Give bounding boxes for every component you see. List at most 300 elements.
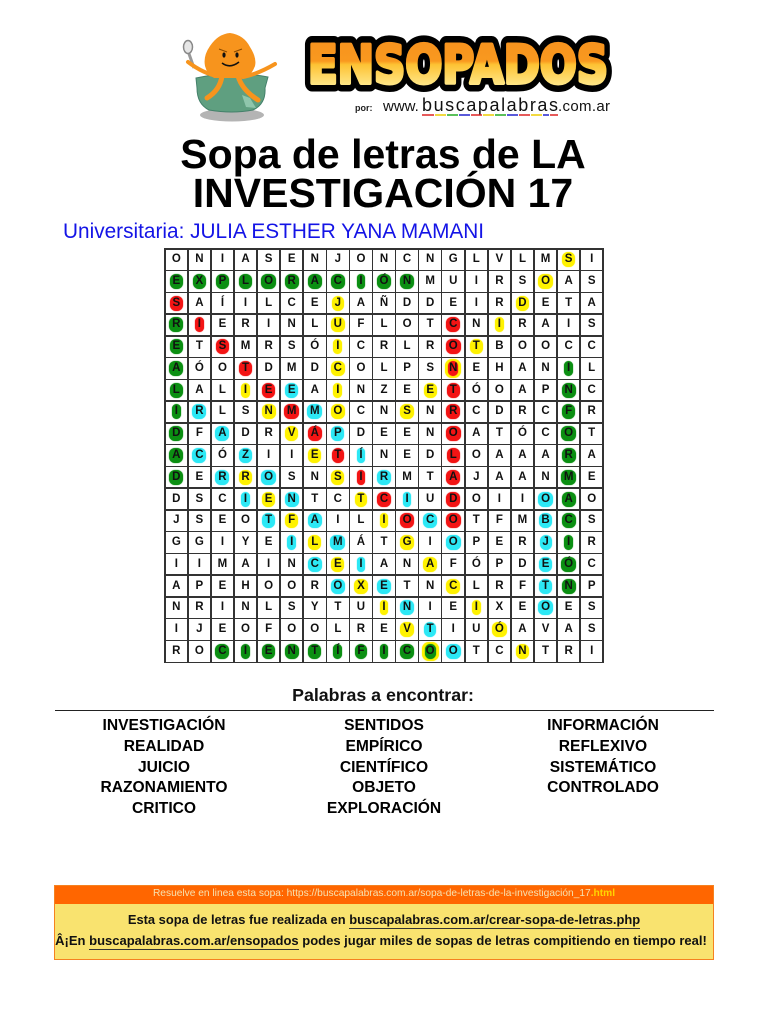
word search grid: C bbox=[357, 405, 365, 417]
word list: column 3 bbox=[547, 716, 659, 796]
word search grid: S bbox=[565, 253, 572, 265]
footer line 2: Â¡En buscapalabras.com.ar/ensopados podes jugar miles de sopas de letras compitiendo en tiempo real! bbox=[55, 933, 707, 948]
word search grid: O bbox=[264, 275, 273, 287]
word search grid: R bbox=[172, 318, 180, 330]
word search grid: A bbox=[564, 623, 573, 635]
word search grid: R bbox=[218, 471, 227, 483]
word search grid: F bbox=[357, 645, 364, 657]
word search grid: R bbox=[518, 536, 527, 548]
word search grid: I bbox=[244, 645, 247, 657]
word search grid: L bbox=[404, 340, 411, 352]
word search grid: T bbox=[427, 471, 434, 483]
word search grid: V bbox=[542, 623, 549, 635]
word search grid: A bbox=[195, 297, 204, 309]
word search grid: E bbox=[542, 558, 549, 570]
word list: column 1: CRITICO bbox=[132, 800, 196, 817]
website credit: buscapalabras bbox=[422, 95, 558, 115]
word list: column 3: REFLEXIVO bbox=[559, 738, 647, 755]
word search grid: A bbox=[518, 362, 527, 374]
word search grid: T bbox=[473, 645, 480, 657]
footer link bar: Resuelve en linea esta sopa: https://buscapalabras.com.ar/sopa-de-letras-de-la-investigación_17.html bbox=[153, 888, 615, 899]
word search grid: E bbox=[403, 449, 411, 461]
word search grid: P bbox=[196, 580, 203, 592]
word search grid: Í bbox=[359, 449, 363, 461]
word search grid: I bbox=[590, 645, 593, 657]
word search grid: U bbox=[426, 493, 434, 505]
word search grid: I bbox=[336, 384, 339, 396]
word search grid: S bbox=[519, 275, 526, 287]
word search grid: A bbox=[311, 275, 319, 287]
word search grid: A bbox=[495, 449, 504, 461]
word search grid: I bbox=[429, 536, 432, 548]
word search grid: Y bbox=[311, 601, 319, 613]
word search grid: Ó bbox=[195, 362, 204, 374]
website credit: por: bbox=[355, 103, 372, 113]
word search grid: I bbox=[382, 514, 386, 526]
word search grid: R bbox=[495, 297, 504, 309]
word search grid: E bbox=[311, 449, 319, 461]
word search grid: A bbox=[541, 449, 550, 461]
word search grid: D bbox=[518, 297, 527, 309]
word search grid: F bbox=[265, 623, 272, 635]
word search grid: P bbox=[496, 558, 503, 570]
word search grid: L bbox=[311, 536, 318, 548]
word search grid: S bbox=[334, 471, 342, 483]
word search grid: L bbox=[334, 623, 341, 635]
word list: column 2 bbox=[327, 717, 441, 817]
word search grid: L bbox=[473, 580, 480, 592]
word search grid: J bbox=[542, 536, 549, 548]
word search grid: I bbox=[175, 623, 178, 635]
word search grid: A bbox=[588, 297, 596, 309]
word search grid: A bbox=[172, 580, 180, 592]
website credit: www. bbox=[382, 98, 419, 115]
word search grid: F bbox=[519, 580, 526, 592]
word search grid: E bbox=[380, 580, 388, 592]
word search grid: C bbox=[380, 493, 388, 505]
word search grid: C bbox=[588, 558, 596, 570]
word search grid: S bbox=[288, 471, 296, 483]
word search grid: O bbox=[287, 580, 296, 592]
word search grid: I bbox=[590, 253, 593, 265]
word search grid: Y bbox=[242, 536, 249, 548]
word search grid: Ó bbox=[380, 275, 388, 287]
word search grid: O bbox=[356, 362, 365, 374]
word search grid: E bbox=[542, 297, 549, 309]
word search grid: R bbox=[518, 318, 527, 330]
word search grid: T bbox=[588, 427, 595, 439]
word search grid: B bbox=[495, 340, 504, 352]
word search grid: R bbox=[264, 340, 273, 352]
word list: column 2: SENTIDOS bbox=[344, 717, 424, 734]
word search grid: U bbox=[357, 601, 365, 613]
word search grid: O bbox=[449, 427, 458, 439]
word search grid: V bbox=[496, 253, 503, 265]
word search grid bbox=[164, 248, 604, 663]
word search grid: N bbox=[541, 471, 550, 483]
word search grid: D bbox=[403, 297, 411, 309]
word list: column 3: INFORMACIÓN bbox=[547, 717, 659, 734]
word search grid: R bbox=[380, 340, 388, 352]
word search grid: C bbox=[449, 580, 457, 592]
word search grid: D bbox=[172, 427, 180, 439]
word search grid: S bbox=[588, 623, 596, 635]
word search grid: S bbox=[588, 514, 596, 526]
word search grid: C bbox=[588, 340, 596, 352]
word search grid: I bbox=[221, 536, 224, 548]
word search grid: Ñ bbox=[380, 297, 388, 309]
word search grid: A bbox=[172, 449, 180, 461]
word search grid: A bbox=[518, 384, 527, 396]
word search grid: G bbox=[449, 253, 458, 265]
word search grid: A bbox=[472, 427, 480, 439]
word search grid: C bbox=[334, 275, 342, 287]
word search grid: R bbox=[588, 405, 596, 417]
word search grid: O bbox=[449, 645, 458, 657]
word search grid: H bbox=[495, 362, 504, 374]
word search grid: D bbox=[495, 405, 504, 417]
word search grid: T bbox=[404, 580, 411, 592]
word search grid: O bbox=[310, 623, 319, 635]
word search grid: F bbox=[288, 514, 295, 526]
word search grid: N bbox=[426, 253, 434, 265]
word search grid: Á bbox=[357, 536, 365, 548]
word search grid: P bbox=[472, 536, 480, 548]
word search grid: R bbox=[495, 580, 504, 592]
word list: column 3: SISTEMÁTICO bbox=[550, 759, 656, 776]
word search grid: T bbox=[473, 340, 480, 352]
word search grid: A bbox=[380, 558, 388, 570]
word search grid: J bbox=[335, 297, 341, 309]
word search grid: S bbox=[588, 318, 596, 330]
word search grid: J bbox=[335, 253, 341, 265]
word search grid: S bbox=[219, 340, 226, 352]
word search grid: N bbox=[426, 405, 434, 417]
word search grid: O bbox=[518, 340, 527, 352]
word search grid: O bbox=[449, 340, 458, 352]
word search grid: L bbox=[173, 384, 180, 396]
word search grid: A bbox=[218, 427, 227, 439]
word search grid: B bbox=[541, 514, 550, 526]
word search grid: A bbox=[495, 471, 504, 483]
word search grid: O bbox=[587, 493, 596, 505]
footer link bar bbox=[55, 886, 713, 904]
word search grid: S bbox=[242, 405, 249, 417]
word search grid: N bbox=[449, 362, 457, 374]
word search grid: N bbox=[564, 384, 573, 396]
word search grid: A bbox=[564, 275, 573, 287]
word search grid: I bbox=[221, 601, 224, 613]
word search grid: E bbox=[219, 580, 226, 592]
word search grid: T bbox=[334, 601, 341, 613]
word search grid: T bbox=[334, 449, 341, 461]
word search grid: C bbox=[403, 253, 411, 265]
word search grid: R bbox=[588, 536, 596, 548]
word search grid: R bbox=[564, 645, 573, 657]
word search grid: S bbox=[426, 362, 434, 374]
word search grid: R bbox=[357, 623, 365, 635]
word search grid: E bbox=[380, 623, 388, 635]
word search grid: O bbox=[403, 514, 412, 526]
word search grid: N bbox=[426, 427, 434, 439]
word search grid: D bbox=[311, 362, 319, 374]
word search grid: E bbox=[519, 601, 526, 613]
word search grid: I bbox=[198, 558, 201, 570]
word search grid: J bbox=[473, 471, 480, 483]
title: Sopa de letras de LA bbox=[180, 131, 586, 177]
word search grid: P bbox=[219, 275, 226, 287]
word search grid: A bbox=[588, 449, 596, 461]
word search grid: C bbox=[334, 362, 342, 374]
word search grid: L bbox=[450, 449, 457, 461]
word search grid: T bbox=[242, 362, 249, 374]
word search grid: C bbox=[588, 384, 596, 396]
word search grid: M bbox=[218, 558, 227, 570]
word search grid: N bbox=[195, 253, 204, 265]
word list heading: Palabras a encontrar: bbox=[292, 685, 474, 705]
word search grid: A bbox=[311, 514, 319, 526]
word search grid: A bbox=[449, 471, 457, 483]
word search grid: E bbox=[196, 471, 203, 483]
word search grid: C bbox=[541, 427, 550, 439]
word search grid: E bbox=[588, 471, 596, 483]
word search grid: L bbox=[588, 362, 595, 374]
word search grid: M bbox=[564, 471, 573, 483]
word search grid: D bbox=[172, 493, 180, 505]
word search grid: C bbox=[449, 318, 457, 330]
word search grid: F bbox=[450, 558, 457, 570]
word search grid: R bbox=[311, 580, 319, 592]
word search grid: S bbox=[172, 297, 180, 309]
word search grid: X bbox=[357, 580, 365, 592]
word search grid: D bbox=[426, 449, 434, 461]
word search grid: R bbox=[426, 340, 434, 352]
word search grid: T bbox=[427, 318, 434, 330]
word search grid: M bbox=[518, 514, 527, 526]
word search grid: M bbox=[241, 340, 250, 352]
word search grid: A bbox=[541, 318, 550, 330]
word search grid: L bbox=[219, 405, 226, 417]
website credit bbox=[355, 95, 610, 115]
word search grid: T bbox=[565, 297, 572, 309]
word search grid: E bbox=[449, 297, 457, 309]
word search grid: I bbox=[359, 275, 363, 287]
word search grid: E bbox=[172, 275, 180, 287]
word search grid: O bbox=[356, 253, 365, 265]
word search grid: O bbox=[541, 601, 550, 613]
word search grid: X bbox=[196, 275, 203, 287]
word search grid: C bbox=[218, 645, 227, 657]
word search grid: M bbox=[402, 471, 412, 483]
word search grid: D bbox=[426, 297, 434, 309]
word search grid: Ó bbox=[218, 449, 227, 461]
word search grid: E bbox=[449, 601, 457, 613]
word search grid: N bbox=[518, 645, 527, 657]
word search grid: P bbox=[588, 580, 596, 592]
word search grid: O bbox=[541, 275, 550, 287]
word search grid: N bbox=[311, 471, 319, 483]
word search grid: S bbox=[196, 514, 203, 526]
word search grid: O bbox=[241, 623, 250, 635]
word search grid: T bbox=[450, 384, 457, 396]
word search grid: S bbox=[288, 340, 296, 352]
word search grid: E bbox=[334, 558, 342, 570]
word search grid: A bbox=[311, 384, 319, 396]
word search grid: Ó bbox=[564, 558, 573, 570]
word search grid: I bbox=[290, 449, 293, 461]
word search grid: N bbox=[403, 601, 411, 613]
word search grid: O bbox=[541, 493, 550, 505]
word list: column 1: RAZONAMIENTO bbox=[100, 779, 228, 796]
word search grid: M bbox=[333, 536, 343, 548]
word search grid: I bbox=[429, 601, 432, 613]
word search grid: E bbox=[472, 362, 480, 374]
word search grid: S bbox=[588, 275, 596, 287]
word search grid: N bbox=[380, 449, 388, 461]
word search grid: A bbox=[241, 558, 250, 570]
word search grid: F bbox=[357, 318, 364, 330]
word search grid: Á bbox=[311, 427, 319, 439]
footer line 1: Esta sopa de letras fue realizada en buscapalabras.com.ar/crear-sopa-de-letras.php bbox=[128, 912, 640, 927]
word search grid: E bbox=[265, 493, 272, 505]
word search grid: D bbox=[264, 362, 273, 374]
title bbox=[180, 131, 586, 216]
word search grid: C bbox=[472, 405, 480, 417]
word search grid: L bbox=[357, 514, 364, 526]
word search grid: H bbox=[241, 580, 250, 592]
word search grid: A bbox=[241, 253, 250, 265]
word search grid: N bbox=[357, 384, 365, 396]
word search grid: Z bbox=[380, 384, 388, 396]
word search grid: N bbox=[472, 318, 480, 330]
word search grid: L bbox=[265, 601, 272, 613]
word search grid: S bbox=[196, 493, 203, 505]
word search grid: N bbox=[172, 601, 180, 613]
word search grid: C bbox=[218, 493, 227, 505]
word search grid: I bbox=[567, 362, 570, 374]
word search grid: T bbox=[473, 514, 480, 526]
word search grid: L bbox=[311, 318, 318, 330]
word search grid: I bbox=[336, 340, 339, 352]
word search grid: C bbox=[334, 493, 342, 505]
word search grid: D bbox=[357, 427, 365, 439]
word search grid: R bbox=[564, 449, 573, 461]
word search grid: U bbox=[472, 623, 480, 635]
word search grid: E bbox=[288, 384, 296, 396]
word search grid: M bbox=[287, 362, 296, 374]
word search grid: E bbox=[219, 514, 226, 526]
word search grid: R bbox=[518, 405, 527, 417]
word search grid: G bbox=[172, 536, 181, 548]
word search grid: L bbox=[473, 253, 480, 265]
word search grid: O bbox=[172, 253, 181, 265]
word search grid: Í bbox=[336, 645, 339, 657]
word search grid: E bbox=[172, 340, 180, 352]
word search grid: L bbox=[242, 275, 249, 287]
word search grid: I bbox=[475, 297, 478, 309]
word search grid: I bbox=[382, 645, 386, 657]
word search grid: F bbox=[196, 427, 203, 439]
word search grid: N bbox=[403, 275, 411, 287]
word search grid: I bbox=[336, 514, 339, 526]
word search grid: C bbox=[426, 514, 434, 526]
word search grid: N bbox=[403, 558, 411, 570]
word search grid: Ó bbox=[310, 340, 319, 352]
word search grid: I bbox=[382, 601, 386, 613]
word search grid: L bbox=[380, 362, 388, 374]
word search grid: T bbox=[311, 493, 318, 505]
word search grid: E bbox=[265, 645, 272, 657]
word search grid: T bbox=[542, 580, 549, 592]
word search grid: N bbox=[288, 558, 296, 570]
word search grid: A bbox=[357, 297, 365, 309]
word search grid: A bbox=[195, 384, 204, 396]
word search grid: R bbox=[172, 645, 180, 657]
word search grid: I bbox=[359, 558, 363, 570]
word search grid: O bbox=[472, 449, 481, 461]
word search grid: R bbox=[495, 275, 504, 287]
footer banner bbox=[54, 885, 714, 960]
word search grid: P bbox=[403, 362, 411, 374]
word search grid: L bbox=[219, 384, 226, 396]
word search grid: U bbox=[449, 275, 457, 287]
word list: column 1: INVESTIGACIÓN bbox=[102, 717, 226, 734]
word search grid: O bbox=[333, 405, 342, 417]
word search grid: E bbox=[311, 297, 319, 309]
word search grid: N bbox=[288, 645, 296, 657]
word search grid: T bbox=[542, 645, 549, 657]
word search grid: I bbox=[567, 318, 570, 330]
word search grid: S bbox=[288, 601, 296, 613]
word search grid: N bbox=[541, 362, 550, 374]
word search grid: R bbox=[264, 427, 273, 439]
word search grid: Ó bbox=[472, 558, 481, 570]
word search grid: I bbox=[452, 623, 455, 635]
word search grid: E bbox=[288, 253, 296, 265]
author line: Universitaria: JULIA ESTHER YANA MAMANI bbox=[63, 220, 484, 243]
word search grid: O bbox=[218, 362, 227, 374]
word search grid: I bbox=[244, 297, 247, 309]
word list: column 3: CONTROLADO bbox=[547, 779, 659, 796]
word search grid: O bbox=[449, 536, 458, 548]
word search grid: I bbox=[567, 536, 570, 548]
word search grid: C bbox=[564, 514, 573, 526]
word search grid: R bbox=[195, 405, 204, 417]
word search grid: N bbox=[288, 318, 296, 330]
word search grid: C bbox=[564, 340, 573, 352]
word search grid: O bbox=[495, 384, 504, 396]
word search grid: E bbox=[426, 384, 434, 396]
word search grid: I bbox=[267, 449, 270, 461]
word search grid: C bbox=[357, 340, 365, 352]
word search grid: O bbox=[564, 427, 573, 439]
word search grid: N bbox=[288, 493, 296, 505]
word search grid: M bbox=[541, 253, 550, 265]
word search grid: A bbox=[426, 558, 434, 570]
word search grid: J bbox=[173, 514, 179, 526]
word search grid: O bbox=[449, 514, 458, 526]
word search grid: G bbox=[403, 536, 412, 548]
word list: column 1 bbox=[100, 716, 228, 817]
word search grid: I bbox=[405, 493, 409, 505]
website credit: .com.ar bbox=[558, 98, 610, 115]
word search grid: T bbox=[380, 536, 388, 548]
word search grid: N bbox=[380, 253, 388, 265]
word search grid: A bbox=[518, 623, 527, 635]
word search grid: U bbox=[334, 318, 342, 330]
word search grid: A bbox=[518, 471, 527, 483]
word search grid: V bbox=[403, 623, 411, 635]
